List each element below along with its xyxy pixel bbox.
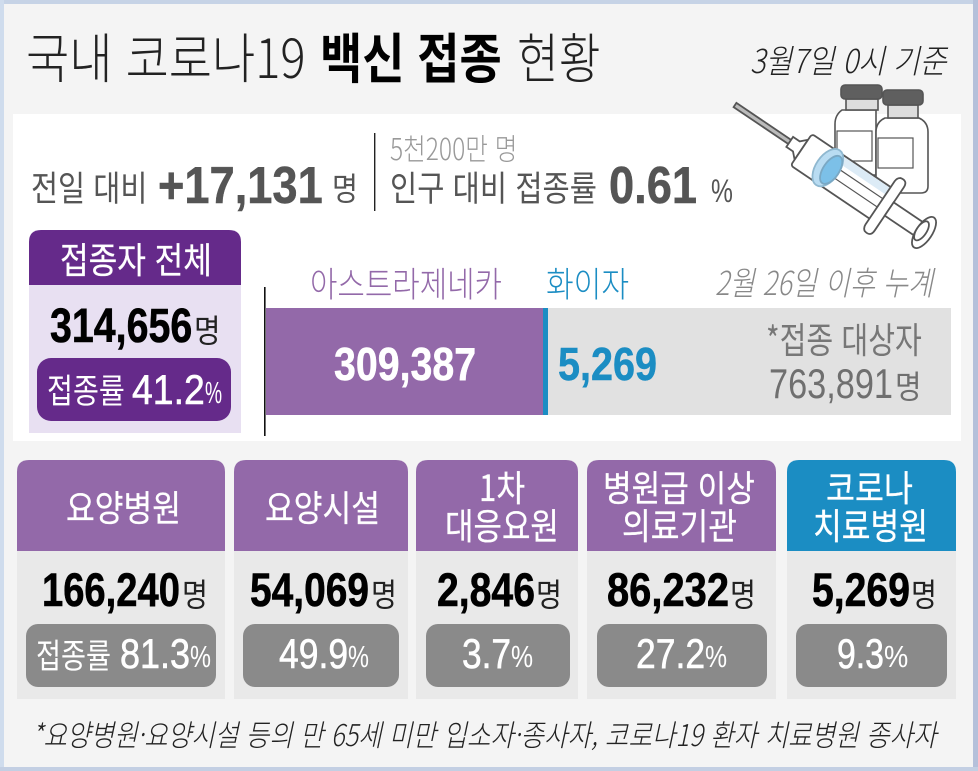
panel: nursing facilities: 요양시설 (265, 479, 380, 532)
divider (374, 133, 375, 211)
population rate: 5천200만 명 (390, 125, 517, 169)
panel: nursing facilities: % (348, 639, 369, 674)
panel: nursing facilities: 54,069 (250, 565, 369, 617)
panel: nursing hospitals: 요양병원 (66, 479, 181, 532)
panel: nursing facilities: 명 (371, 569, 397, 616)
title: 국내 코로나19 (26, 15, 306, 94)
title: 백신 접종 (320, 17, 502, 94)
title: 현황 (517, 16, 600, 94)
panel: hospital-level medical institutions (587, 459, 776, 699)
title (26, 15, 600, 94)
population rate (390, 125, 733, 215)
icon: vaccine vials and syringe (717, 78, 949, 264)
panel: first responders: 2,846 (437, 565, 535, 617)
panel: total vaccinated: 접종률 (47, 364, 125, 413)
population rate: % (711, 174, 733, 210)
panel: total vaccinated (29, 230, 241, 433)
panel: nursing hospitals: 접종률 (36, 628, 111, 678)
panel: first responders: 1차 (479, 459, 525, 512)
axis line (264, 287, 266, 436)
date note: 3월7일 0시 기준 (750, 35, 949, 83)
panel: nursing facilities (234, 460, 408, 699)
stacked bar chart: 309,387 (334, 339, 476, 391)
panel: COVID treatment hospitals: 코로나 (826, 459, 913, 512)
panel: total vaccinated: 명 (194, 305, 221, 351)
stacked bar chart: *접종 대상자 (766, 312, 922, 364)
panel: COVID treatment hospitals: 5,269 (812, 565, 910, 617)
panel: nursing hospitals: % (190, 639, 211, 674)
population rate: 0.61 (609, 157, 697, 215)
daily increase: 명 (332, 163, 358, 210)
population rate: 인구 대비 접종률 (390, 161, 597, 212)
panel: first responders: % (511, 639, 533, 674)
panel: total vaccinated: 접종자 전체 (60, 231, 212, 284)
panel: nursing hospitals: 명 (182, 569, 208, 616)
panel: COVID treatment hospitals: 치료병원 (813, 497, 928, 550)
panel: nursing hospitals: 81.3 (120, 631, 190, 678)
panel: nursing facilities: 49.9 (279, 631, 348, 678)
daily increase: +17,131 (158, 157, 323, 215)
bar labels: 화이자 (546, 257, 629, 308)
panel: total vaccinated: 41.2 (132, 367, 205, 414)
panel: total vaccinated: % (205, 377, 222, 410)
panel: first responders: 3.7 (462, 631, 511, 678)
panel: COVID treatment hospitals: 명 (911, 569, 937, 616)
panel: first responders: 명 (536, 569, 562, 616)
panel: hospital-level medical institutions: 27.2 (636, 631, 705, 678)
daily increase: 전일 대비 (31, 162, 147, 212)
bar labels (310, 257, 936, 308)
panel: hospital-level medical institutions: 86,232 (607, 565, 729, 617)
panel: hospital-level medical institutions: 명 (730, 569, 756, 616)
panel: nursing hospitals (17, 460, 225, 699)
stacked bar chart: 5,269 (558, 339, 657, 391)
panel: COVID treatment hospitals: % (884, 640, 908, 674)
panel: total vaccinated: 314,656 (50, 299, 192, 353)
panel: COVID treatment hospitals (787, 459, 956, 699)
panel: hospital-level medical institutions: 의료기관 (622, 497, 737, 550)
panel: nursing hospitals: 166,240 (42, 564, 180, 617)
bar labels: 2월 26일 이후 누계 (715, 257, 936, 305)
stacked bar chart (266, 308, 951, 415)
panel: hospital-level medical institutions: % (705, 639, 727, 674)
panel: first responders (416, 459, 578, 699)
daily increase (31, 157, 358, 215)
stacked bar chart: 763,891 (769, 361, 893, 408)
bar labels: 아스트라제네카 (310, 257, 502, 308)
footnote: *요양병원·요양시설 등의 만 65세 미만 입소자·종사자, 코로나19 환자 치료병원 종사자 (32, 713, 939, 756)
stacked bar chart: 명 (895, 361, 922, 407)
panel: first responders: 대응요원 (445, 497, 559, 550)
panel: hospital-level medical institutions: 병원급 이상 (603, 459, 755, 512)
panel: COVID treatment hospitals: 9.3 (837, 631, 884, 678)
